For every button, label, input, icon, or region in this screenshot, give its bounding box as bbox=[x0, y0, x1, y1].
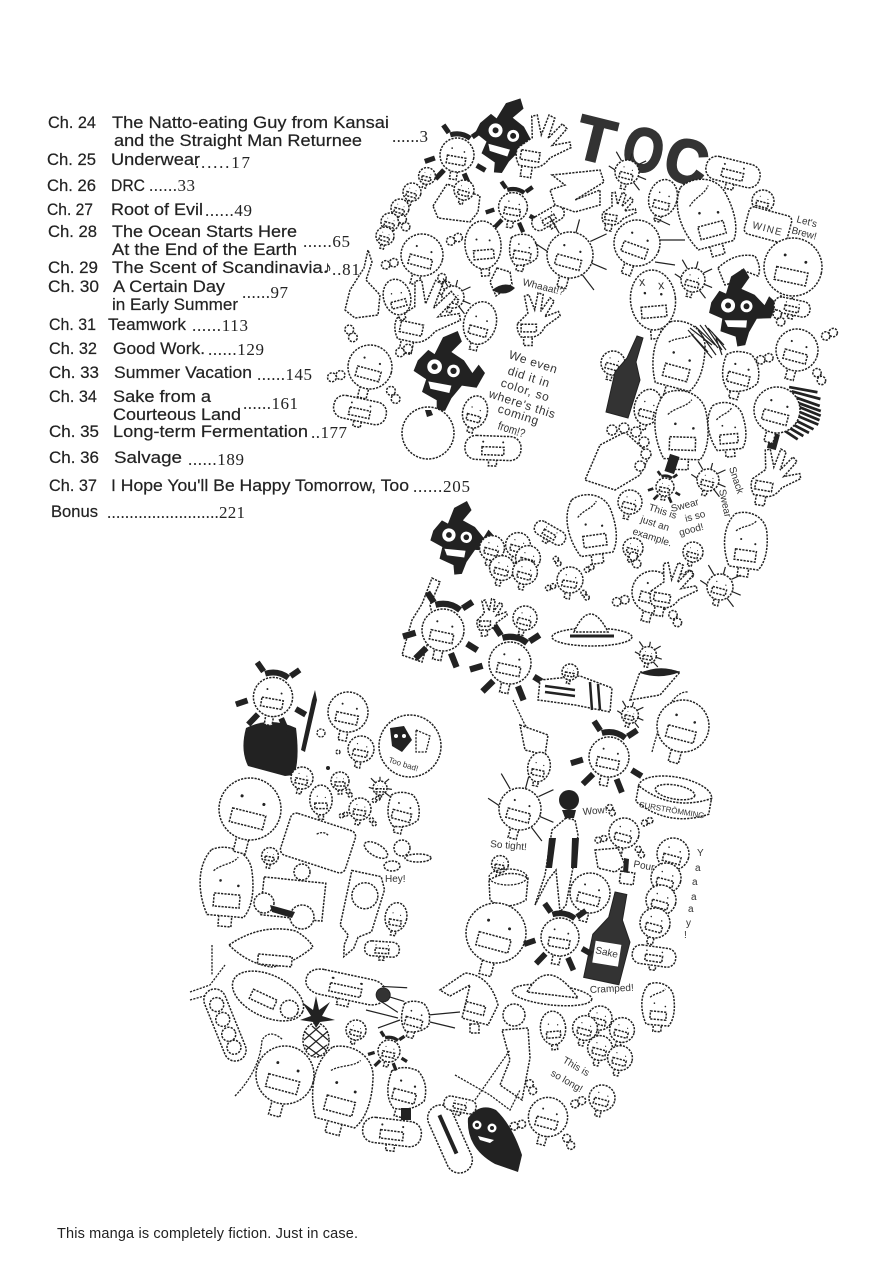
entry: chapter 25: ......17 bbox=[195, 153, 250, 172]
entry: chapter 28: Ch. 28 bbox=[48, 222, 97, 241]
entry: chapter 26: Ch. 26 bbox=[47, 176, 96, 195]
entry: chapter 34: Sake from a bbox=[113, 387, 212, 406]
character with black spiky hair bbox=[745, 377, 826, 459]
entry: chapter 24: Ch. 24 bbox=[48, 113, 96, 132]
entry: chapter 36: Ch. 36 bbox=[49, 448, 99, 467]
entry: chapter 25: Ch. 25 bbox=[47, 150, 96, 169]
entry: chapter 28 bbox=[48, 222, 350, 259]
entry: chapter 36: Salvage bbox=[114, 448, 182, 467]
footer note: This manga is completely fiction. Just in case. bbox=[57, 1226, 358, 1242]
black pen bbox=[301, 690, 317, 752]
entry: chapter 36: ......189 bbox=[188, 450, 244, 469]
entry: chapter 35: Ch. 35 bbox=[49, 422, 99, 441]
speech: we even did it in color bbox=[486, 348, 559, 441]
entry: chapter 28: The Ocean Starts Here bbox=[112, 222, 297, 241]
title: TOC lettering: C bbox=[658, 124, 715, 201]
entry: chapter 34: ......161 bbox=[243, 394, 298, 413]
surströmming can bbox=[634, 771, 714, 824]
title: TOC lettering: O bbox=[616, 113, 671, 189]
entry: chapter 29: The Scent of Scandinavia♪ bbox=[112, 258, 332, 277]
standing man bbox=[535, 790, 579, 912]
UFO bbox=[511, 975, 593, 1009]
entry: chapter 34 bbox=[49, 387, 298, 424]
wine crate: WINE bbox=[751, 220, 783, 239]
speech: yaaaay: Y bbox=[697, 848, 704, 859]
entry: chapter 27: ......49 bbox=[205, 201, 252, 220]
entry: chapter 32: Good Work. bbox=[113, 339, 205, 358]
entry: chapter 31: Teamwork bbox=[108, 315, 186, 334]
entry: chapter 31 bbox=[49, 315, 248, 335]
speech: this is just an example / so good: Swear bbox=[670, 497, 701, 515]
entry: chapter 37: I Hope You'll Be Happy Tomorrow, Too bbox=[111, 476, 409, 495]
speech: this is so long: so long! bbox=[548, 1068, 584, 1095]
speech: let's brew: Let's bbox=[795, 214, 818, 230]
speech: this is just an example / so good: Swear bbox=[716, 488, 733, 519]
speech: yaaaay: y bbox=[686, 918, 691, 929]
entry: chapter 35: ..177 bbox=[311, 423, 348, 442]
speech: yaaaay: ! bbox=[684, 930, 687, 941]
table of contents list bbox=[47, 113, 470, 522]
entry: chapter 34: Ch. 34 bbox=[49, 387, 97, 406]
entry: bonus: .........................221 bbox=[107, 503, 245, 522]
entry: chapter 30: in Early Summer bbox=[112, 295, 238, 314]
entry: chapter 29 bbox=[48, 258, 360, 279]
entry: chapter 37: Ch. 37 bbox=[49, 476, 97, 495]
entry: bonus: Bonus bbox=[51, 502, 98, 521]
jug bbox=[334, 870, 387, 962]
entry: chapter 30: Ch. 30 bbox=[48, 277, 99, 296]
oval character bbox=[225, 961, 311, 1031]
speech: we even did it in color: from!? bbox=[496, 419, 527, 441]
entry: chapter 25 bbox=[47, 150, 250, 172]
lower arc characters bbox=[190, 660, 522, 1177]
entry: chapter 28: At the End of the Earth bbox=[112, 240, 297, 259]
entry: chapter 30 bbox=[48, 277, 288, 314]
soy sauce bottle: Sake bbox=[594, 945, 619, 961]
entry: chapter 28: ......65 bbox=[303, 232, 350, 251]
entry: chapter 32 bbox=[49, 339, 264, 359]
entry: chapter 32: ......129 bbox=[208, 340, 264, 359]
entry: chapter 37: ......205 bbox=[413, 477, 470, 496]
speech: this is just an example / so good: Snack bbox=[726, 466, 746, 496]
speech: this is so long: This is bbox=[560, 1055, 591, 1079]
entry: chapter 26: ......33 bbox=[149, 176, 195, 195]
surströmming can: SURSTRÖMMING bbox=[639, 800, 705, 820]
surfboard bbox=[423, 1101, 477, 1177]
entry: chapter 36 bbox=[49, 448, 244, 469]
entry: chapter 29: ..81 bbox=[332, 260, 360, 279]
speech: yaaaay: a bbox=[695, 863, 701, 874]
entry: chapter 37 bbox=[49, 476, 470, 496]
striped box bbox=[538, 663, 612, 712]
pineapple bbox=[300, 996, 335, 1057]
speech: we even did it in color: did it in bbox=[506, 364, 551, 390]
speech: we even did it in color: where's this bbox=[486, 386, 557, 421]
speech: whaaat: Whaaat!? bbox=[521, 277, 566, 298]
title: TOC lettering bbox=[569, 103, 715, 201]
entry: chapter 35 bbox=[49, 422, 348, 442]
speech: let's brew: Brew! bbox=[790, 225, 818, 243]
entry: chapter 24 bbox=[48, 113, 428, 150]
speech: this is just an example / so good: is so bbox=[684, 509, 707, 525]
entry: chapter 29: Ch. 29 bbox=[48, 258, 98, 277]
entry: chapter 27: Ch. 27 bbox=[47, 200, 93, 219]
illustration: numeral 3 made of characters bbox=[190, 95, 840, 1177]
entry: chapter 27: Root of Evil bbox=[111, 200, 203, 219]
speech: yaaaay bbox=[684, 848, 704, 941]
speech: we even did it in color: We even bbox=[507, 348, 559, 376]
entry: chapter 33: Summer Vacation bbox=[114, 363, 252, 382]
speech: cramped: Cramped! bbox=[590, 983, 634, 996]
character with crossed eyes: x bbox=[638, 275, 646, 289]
character with crossed eyes: x bbox=[657, 278, 666, 292]
speech: this is just an example / so good: This is bbox=[647, 502, 678, 522]
speech: hey: Hey! bbox=[385, 874, 406, 885]
entry: chapter 25: Underwear bbox=[111, 150, 200, 169]
speech: this is just an example / so good: just an bbox=[638, 514, 670, 534]
entry: chapter 33 bbox=[49, 363, 312, 384]
entry: chapter 26 bbox=[47, 176, 195, 195]
wheelchair car bbox=[254, 864, 326, 929]
black blob character bbox=[468, 1107, 522, 1172]
entry: chapter 24: The Natto-eating Guy from Kansai bbox=[112, 113, 389, 132]
boat and flowers bbox=[630, 639, 680, 700]
speech: yaaaay: a bbox=[688, 904, 694, 915]
eggplant character bbox=[302, 966, 407, 1018]
character with crossed eyes bbox=[628, 268, 679, 341]
entry: chapter 33: ......145 bbox=[257, 365, 312, 384]
firefly bbox=[362, 838, 431, 871]
speech: this is just an example / so good: example. bbox=[631, 526, 673, 549]
entry: chapter 31: ......113 bbox=[192, 316, 248, 335]
entry: chapter 27 bbox=[47, 200, 252, 220]
entry: chapter 26: DRC bbox=[111, 176, 145, 195]
baguette and starfish bbox=[190, 945, 249, 1064]
sombrero bbox=[552, 614, 632, 646]
middle characters bbox=[399, 530, 715, 824]
dark jar bbox=[243, 722, 298, 776]
entry: chapter 24: ......3 bbox=[392, 127, 428, 146]
soy sauce bottle bbox=[584, 889, 640, 985]
entry: chapter 33: Ch. 33 bbox=[49, 363, 99, 382]
right lower characters bbox=[440, 768, 704, 1153]
entry: chapter 35: Long-term Fermentation bbox=[113, 422, 308, 441]
entry: chapter 30: ......97 bbox=[242, 283, 288, 302]
entry: chapter 31: Ch. 31 bbox=[49, 315, 96, 334]
wine bottle bbox=[402, 578, 440, 662]
speech: pour: Pour bbox=[632, 859, 656, 874]
wine crate bbox=[743, 206, 793, 244]
badge: too bad bbox=[379, 715, 441, 777]
speech: we even did it in color: color, so bbox=[499, 376, 551, 404]
orange bbox=[402, 407, 454, 459]
upper arc characters bbox=[325, 95, 840, 631]
entry: chapter 34: Courteous Land bbox=[113, 405, 241, 424]
champagne bottle bbox=[606, 336, 643, 418]
entry: chapter 30: A Certain Day bbox=[113, 277, 226, 296]
box character bbox=[279, 812, 357, 874]
lemon character bbox=[229, 929, 313, 967]
title: TOC lettering: T bbox=[569, 103, 622, 179]
speech: so tight: So tight! bbox=[490, 839, 527, 853]
speech: yaaaay: a bbox=[692, 877, 698, 888]
speech: we even did it in color: coming bbox=[496, 402, 540, 428]
speech: this is just an example / so good bbox=[631, 466, 746, 549]
entry: chapter 24: and the Straight Man Returnee bbox=[114, 131, 362, 150]
speech: yaaaay: a bbox=[691, 892, 697, 903]
speech: wow: Wow! bbox=[582, 805, 608, 818]
badge: too bad: Too bad! bbox=[387, 755, 419, 773]
speech: this is so long bbox=[548, 1055, 591, 1095]
speech: this is just an example / so good: good! bbox=[678, 522, 705, 539]
man with tool bbox=[455, 1004, 530, 1110]
pot bbox=[489, 854, 528, 906]
entry: chapter 32: Ch. 32 bbox=[49, 339, 97, 358]
glove character with bent arm bbox=[440, 973, 498, 1033]
entry: bonus bbox=[51, 502, 245, 522]
